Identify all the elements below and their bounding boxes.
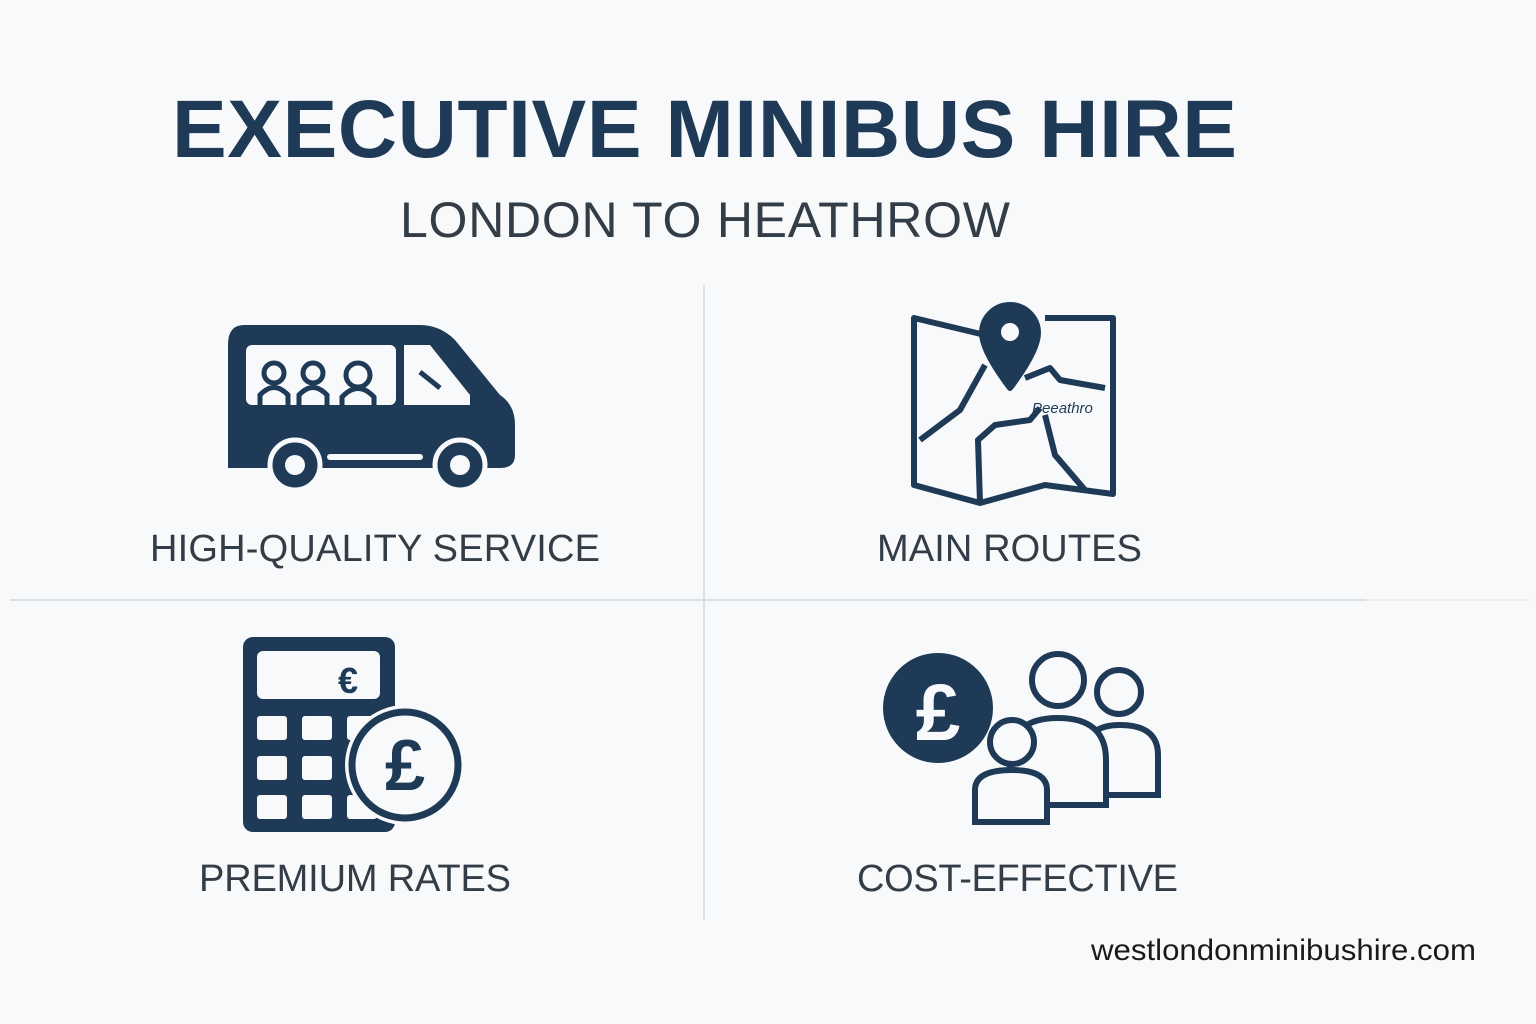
label: main routes: MAIN ROUTES: [877, 528, 1142, 570]
icon: map: Peeathro: [1032, 400, 1093, 417]
icon: minibus: [228, 325, 515, 490]
panel: cost-effective: [857, 653, 1178, 900]
title: EXECUTIVE MINIBUS HIRE: [172, 84, 1237, 175]
website url: westlondonminibushire.com: [1090, 934, 1476, 967]
label: cost-effective: COST-EFFECTIVE: [857, 858, 1178, 900]
icon: calculator: [243, 637, 465, 832]
label: premium rates: PREMIUM RATES: [199, 858, 511, 900]
panel: high-quality service: [150, 325, 600, 570]
panel: premium rates: [199, 637, 511, 900]
icon: calculator: €: [338, 660, 358, 701]
label: high-quality service: HIGH-QUALITY SERVICE: [150, 528, 600, 570]
icon: map: [914, 305, 1113, 503]
icon: pound with group: [883, 653, 1158, 822]
panel: main routes: [877, 305, 1142, 570]
icon: pound with group: £: [916, 668, 960, 757]
icon: calculator: £: [385, 726, 425, 806]
subtitle: LONDON TO HEATHROW: [400, 192, 1011, 248]
